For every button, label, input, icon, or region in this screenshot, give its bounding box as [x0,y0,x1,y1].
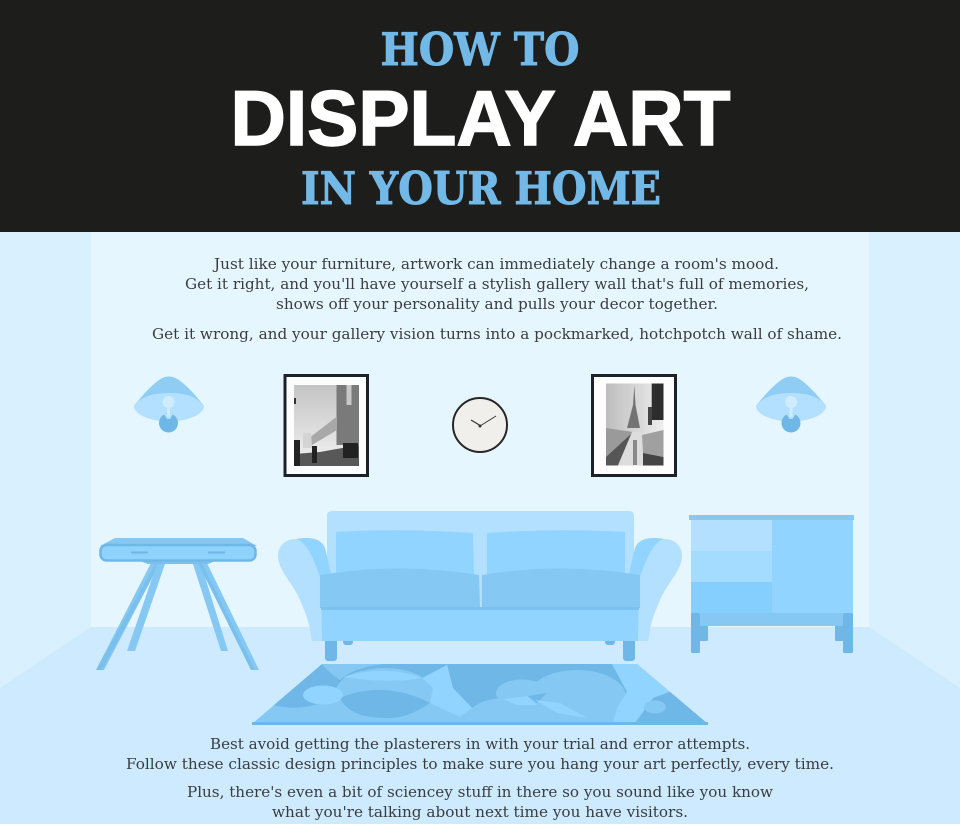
sofa legs [325,638,635,661]
closing text [126,735,834,821]
title line: display art: DISPLAY ART [230,74,730,162]
back cushions [336,530,625,576]
cabinet [689,515,854,653]
table legs [96,561,259,670]
header band [0,0,960,232]
right arm [628,538,664,641]
closing text: what you're talking about next time you have visitors. [272,803,688,821]
sofa base [321,607,639,610]
room background [0,232,960,824]
left arm [296,538,332,641]
icon: wall clock [453,398,507,452]
sofa back [327,511,634,612]
cabinet legs [691,613,853,653]
title line: in your home: IN YOUR HOME [301,162,661,215]
intro text: Just like your furniture, artwork can immediately change a room's mood. [212,255,779,273]
icon: left wall lamp [134,376,204,432]
intro text: Get it right, and you'll have yourself a stylish gallery wall that's full of memories, [185,275,809,293]
sofa [278,511,682,661]
side table [96,538,259,670]
closing text: Best avoid getting the plasterers in with your trial and error attempts. [210,735,750,753]
intro text: shows off your personality and pulls your decor together. [276,295,718,313]
artwork: bridge photograph [285,376,368,476]
cabinet drawers [691,520,772,613]
rug [252,664,708,725]
intro text [152,255,842,343]
artwork: eiffel tower photograph [592,376,676,476]
closing text: Plus, there's even a bit of sciencey stuff in there so you sound like you know [187,783,773,801]
closing text: Follow these classic design principles to make sure you hang your art perfectly, every time. [126,755,834,773]
seat cushions [320,568,480,608]
icon: right wall lamp [756,376,826,432]
title line: how to: HOW TO [380,23,580,76]
intro text: Get it wrong, and your gallery vision turns into a pockmarked, hotchpotch wall of shame. [152,325,842,343]
